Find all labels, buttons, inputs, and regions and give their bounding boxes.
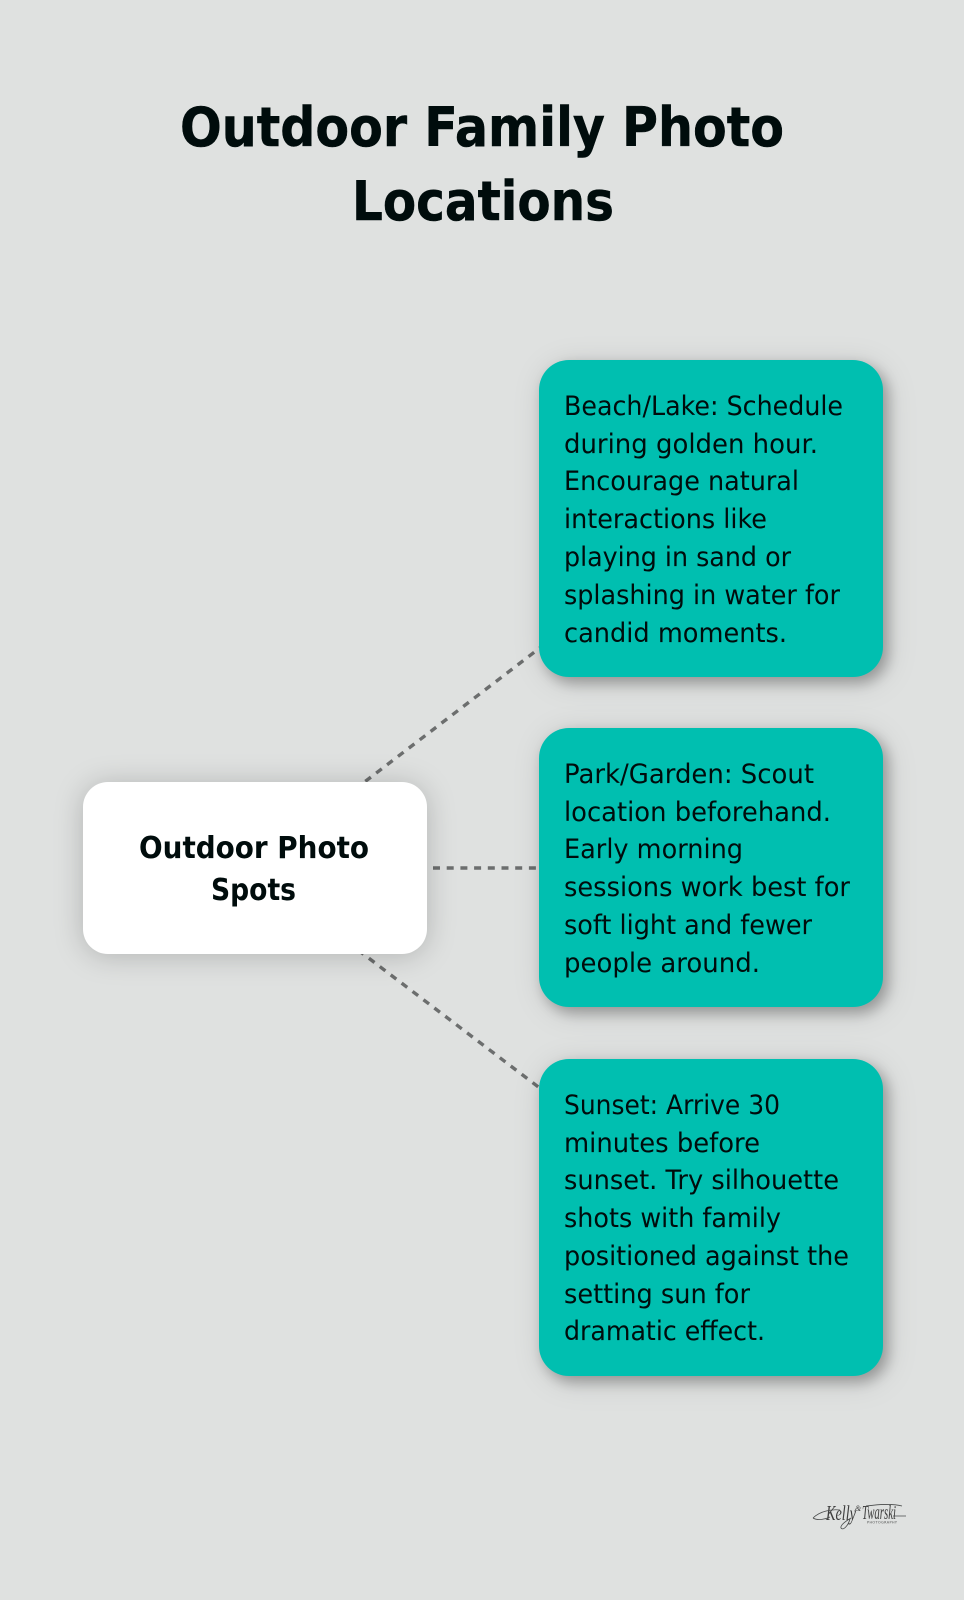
panel: park and garden: people around. <box>564 948 760 979</box>
panel: beach and lake: candid moments. <box>564 618 787 649</box>
panel: park and garden: soft light and fewer <box>564 910 813 941</box>
panel: beach and lake: during golden hour. <box>564 429 818 460</box>
connector: centre to sunset card <box>358 950 545 1092</box>
title: Outdoor Family Photo <box>180 96 784 159</box>
logo: signature <box>813 1501 906 1529</box>
title: Locations <box>352 170 614 233</box>
panel: beach and lake: Encourage natural <box>564 466 799 497</box>
logo: signature: Kelly <box>825 1501 856 1525</box>
panel: sunset: shots with family <box>564 1203 781 1234</box>
title <box>180 96 784 233</box>
panel: beach and lake <box>539 360 883 677</box>
logo: signature: Twarski <box>862 1502 896 1524</box>
panel: sunset: positioned against the <box>564 1241 849 1272</box>
connector: centre to beach card <box>358 644 545 787</box>
panel: central node: Spots <box>211 873 296 908</box>
panel: park and garden: Early morning <box>564 834 743 865</box>
panel: sunset <box>539 1059 883 1376</box>
panel: beach and lake: Beach/Lake: Schedule <box>564 391 843 422</box>
logo: signature: & <box>855 1504 862 1513</box>
panel: park and garden: sessions work best for <box>564 872 851 903</box>
panel: sunset: sunset. Try silhouette <box>564 1165 839 1196</box>
panel: park and garden: location beforehand. <box>564 797 831 828</box>
logo: signature: PHOTOGRAPHY <box>867 1520 898 1524</box>
connector: centre to park card <box>433 866 538 870</box>
panel: central node: Outdoor Photo <box>139 831 369 866</box>
panel: sunset: minutes before <box>564 1128 760 1159</box>
panel: sunset: Sunset: Arrive 30 <box>564 1090 780 1121</box>
panel: beach and lake: splashing in water for <box>564 580 841 611</box>
panel: park and garden: Park/Garden: Scout <box>564 759 814 790</box>
panel: beach and lake: interactions like <box>564 504 767 535</box>
panel: sunset: dramatic effect. <box>564 1316 765 1347</box>
panel: sunset: setting sun for <box>564 1279 751 1310</box>
panel: park and garden <box>539 728 883 1007</box>
panel: central node <box>83 782 427 954</box>
panel: beach and lake: playing in sand or <box>564 542 792 573</box>
